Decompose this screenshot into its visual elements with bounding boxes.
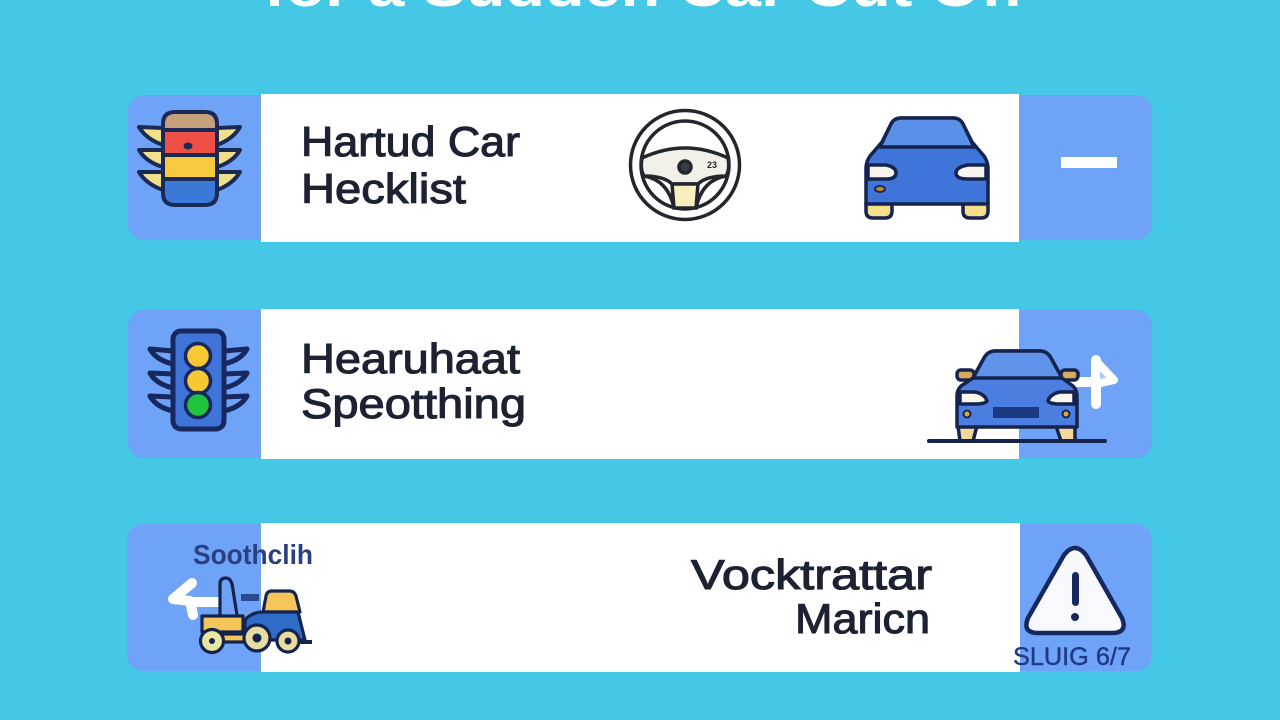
icon: steering wheel [630, 110, 740, 220]
heading: vocktrattar marion: Vocktrattar [691, 551, 932, 598]
heading: hartud car hecklist: Hecklist [301, 165, 466, 212]
icon: traffic light [150, 331, 247, 429]
heading: hearuhaat speotthing [301, 335, 526, 427]
heading: hartud car hecklist [301, 118, 520, 212]
icon: striped traffic light [139, 112, 240, 205]
panel: hearuhaat speotthing [128, 309, 1152, 459]
panel background [127, 524, 1152, 671]
icon: blue car front [866, 118, 988, 218]
label: soothclih: Soothclih [193, 539, 313, 570]
panel white card [261, 309, 1019, 459]
icon: minus bar [1061, 157, 1117, 168]
icon: warning triangle [1026, 548, 1124, 633]
heading: hearuhaat speotthing: Hearuhaat [301, 335, 520, 382]
heading: vocktrattar marion [691, 551, 932, 642]
label: sluig 6/7: SLUIG 6/7 [1013, 643, 1131, 671]
icon: white arrow [1075, 360, 1114, 404]
panel: hartud car checklist [128, 94, 1152, 242]
icon: white arrow [173, 583, 218, 615]
icon: steering wheel: 23 [707, 160, 717, 170]
icon: tractor [200, 578, 312, 652]
panel white card [261, 523, 1020, 672]
heading: vocktrattar marion: Maricn [795, 595, 930, 642]
panel background [128, 95, 1152, 240]
icon: blue car with road [929, 351, 1105, 441]
heading: hartud car hecklist: Hartud Car [301, 118, 520, 165]
panel background [128, 310, 1152, 458]
panel white card [261, 94, 1019, 242]
heading: hearuhaat speotthing: Speotthing [301, 380, 526, 427]
panel: vocktrattar marion [127, 523, 1152, 672]
